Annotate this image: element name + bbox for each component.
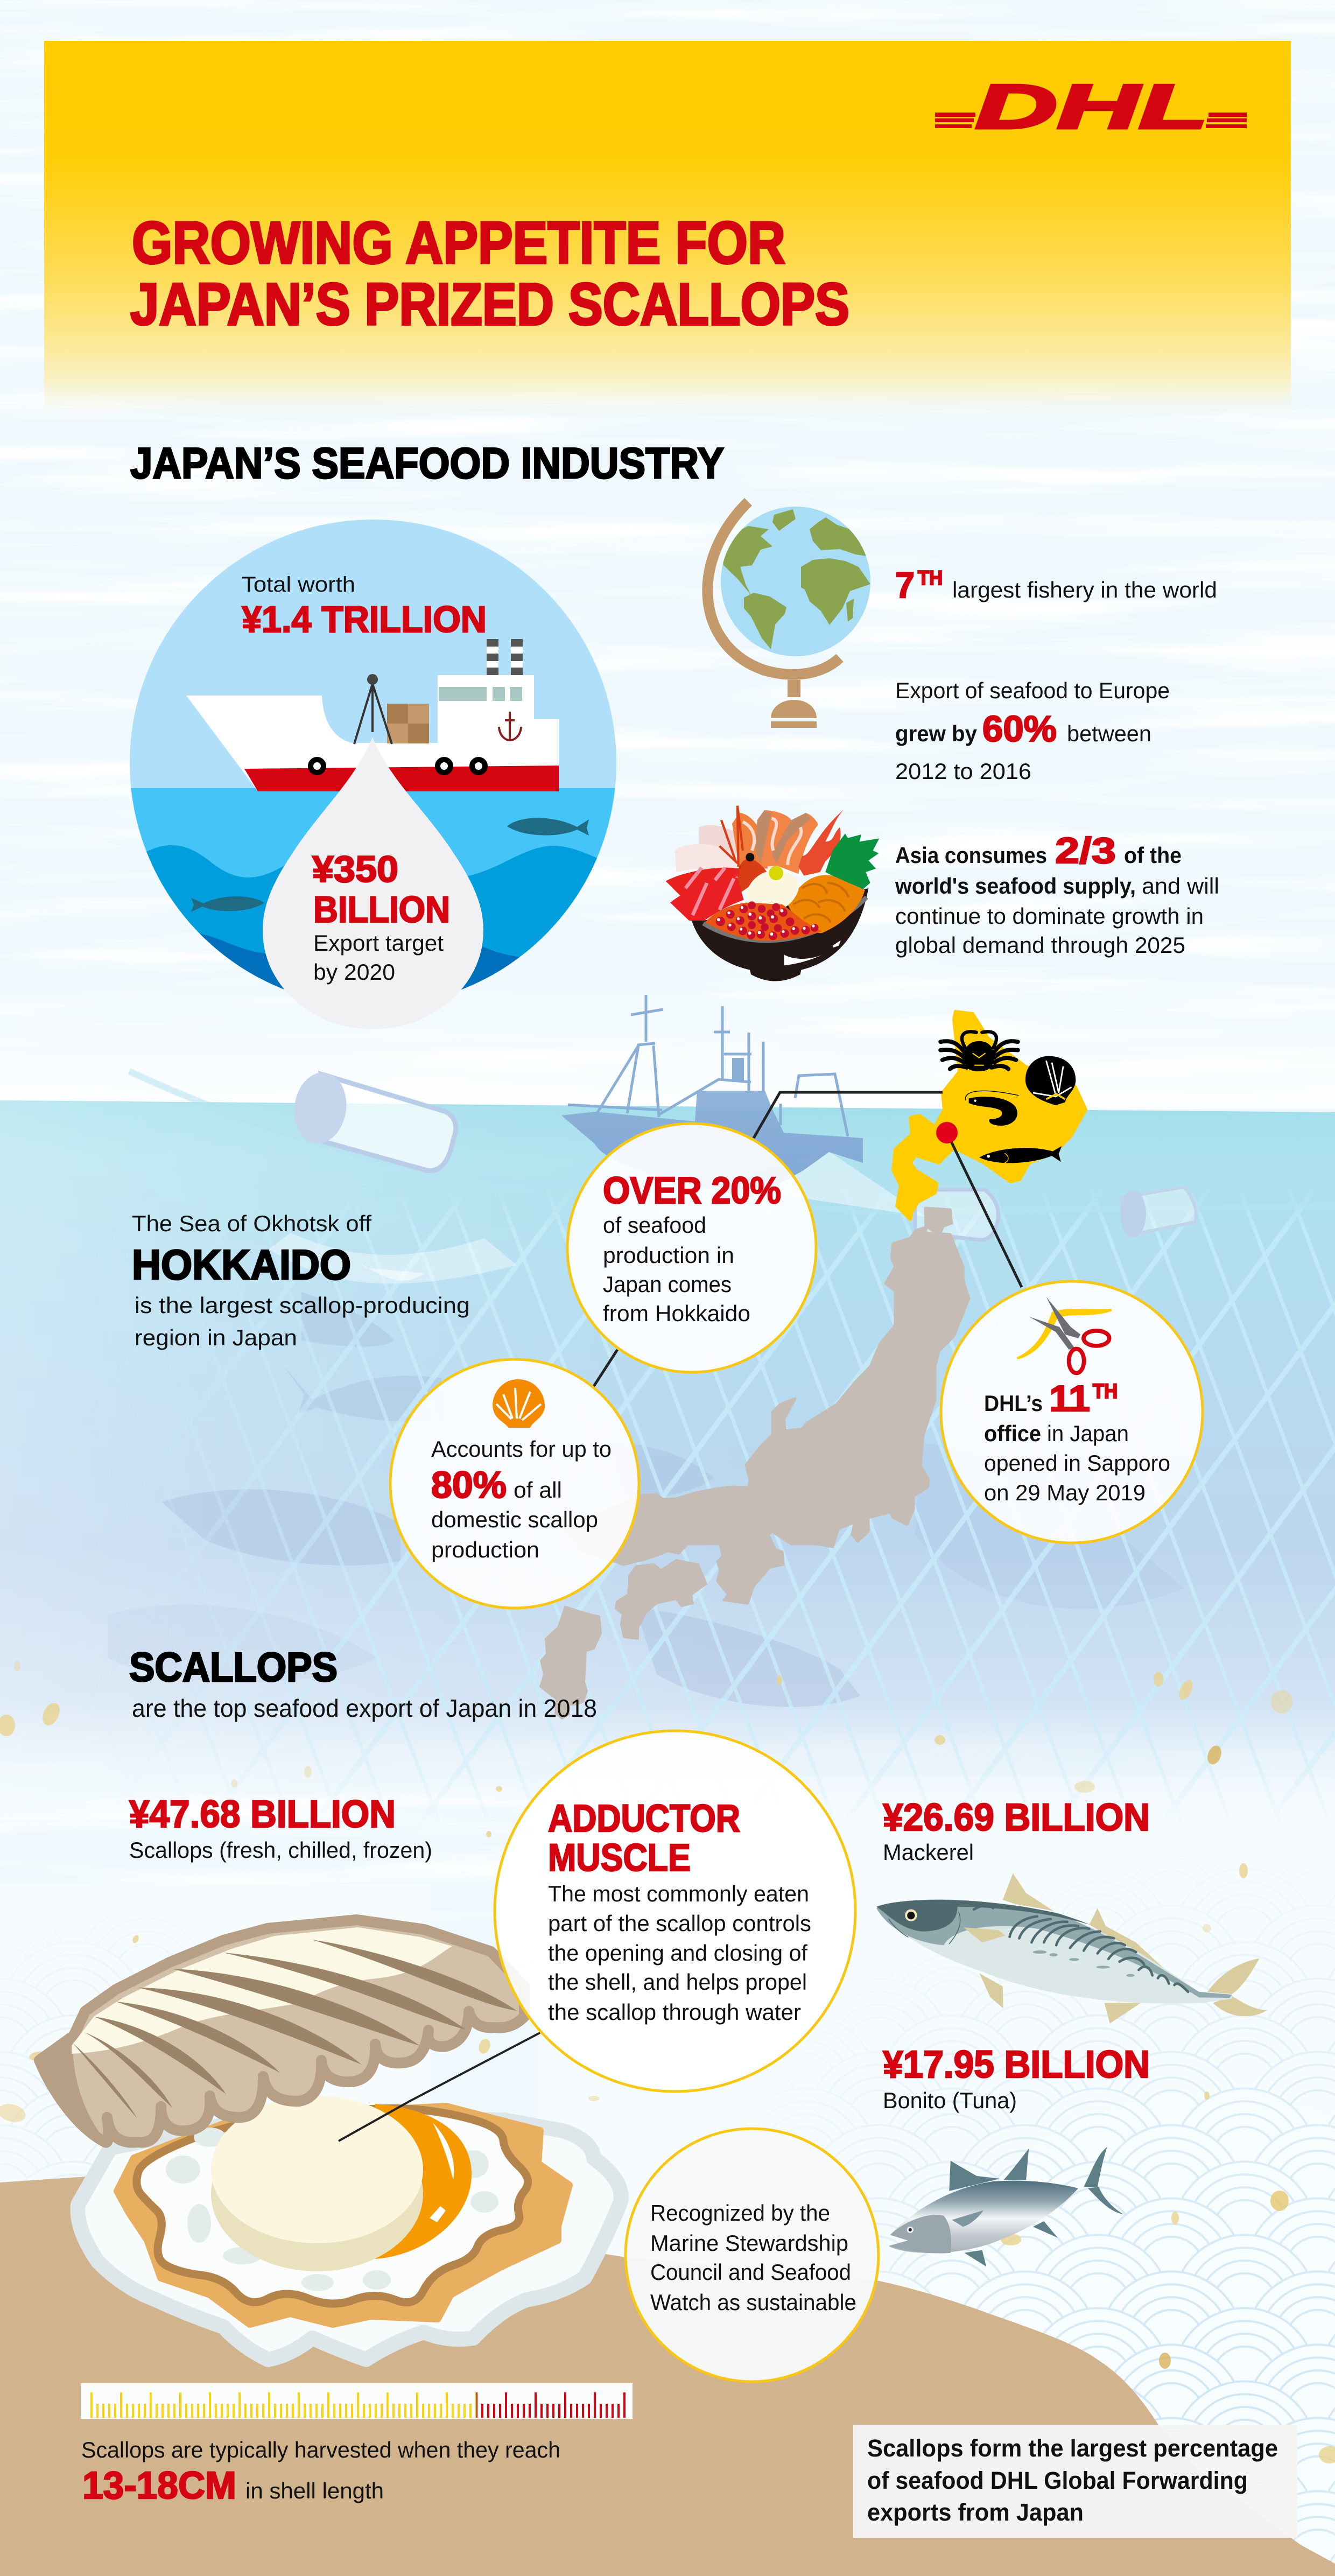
callout: sustainability: [626, 2129, 879, 2382]
stat: 7th largest fishery: 7: [895, 565, 915, 606]
stat: Asia consumption: continue to dominate growth in: [895, 903, 1204, 929]
icon: black scallop: [1025, 1056, 1076, 1105]
stat: bonito value: [883, 2044, 1150, 2113]
adductor muscle: [375, 2104, 472, 2259]
callout: DHL's 11th office: TH: [1093, 1380, 1118, 1403]
callout: DHL's 11th office: DHL’s: [984, 1391, 1043, 1416]
callout: over 20%: OVER 20%: [603, 1169, 781, 1211]
float: left: [290, 1069, 456, 1171]
background: wave pattern left: [0, 1884, 431, 2234]
stat: Asia consumption: 2/3: [1055, 830, 1116, 871]
stat: mackerel value: Mackerel: [883, 1840, 974, 1865]
callout: over 20%: production in: [603, 1243, 734, 1268]
DHL logo: DHL: [975, 72, 1208, 142]
heading: scallops: [129, 1645, 597, 1722]
text: Hokkaido intro: [132, 1211, 470, 1350]
callout: adductor muscle: [495, 1731, 855, 2091]
callout: DHL's 11th office: [941, 1281, 1203, 1543]
icon: shrimp: [966, 1091, 1018, 1126]
bottom shell: [78, 2116, 621, 2360]
stat: 7th largest fishery: TH: [918, 567, 943, 589]
stat: scallops value: ¥47.68 BILLION: [129, 1793, 396, 1836]
heading: Japan's seafood industry: JAPAN’S SEAFOOD INDUSTRY: [130, 439, 724, 488]
callout: over 20%: Japan comes: [603, 1272, 732, 1297]
export target drop: Export target: [313, 930, 444, 956]
ruler: [81, 2383, 633, 2419]
icon: fish right: [507, 818, 589, 836]
icon: globe: [707, 502, 875, 728]
background: left wave fade: [0, 1884, 431, 2234]
callout: adductor muscle: the shell, and helps propel: [548, 1969, 807, 1995]
export target drop: [263, 737, 483, 1029]
callout: 80% of domestic scallop production: domestic scallop: [431, 1507, 598, 1532]
total worth text: ¥1.4 TRILLION: [242, 599, 487, 640]
callout: DHL's 11th office: in Japan: [1047, 1421, 1129, 1446]
text: harvest length: [81, 2437, 560, 2507]
header panel: [44, 41, 1291, 418]
callout: DHL's 11th office: office: [984, 1421, 1041, 1446]
stat: Europe exports: between: [1067, 721, 1151, 746]
background: wave pattern lower right: [538, 1777, 1335, 2576]
decorative petals: [0, 1661, 1335, 2463]
stat: Asia consumption: Asia consumes: [895, 843, 1047, 868]
stat: Europe exports: 2012 to 2016: [895, 759, 1031, 784]
connector: boat to Hokkaido: [754, 1092, 943, 1138]
illustration: mackerel: [876, 1873, 1268, 2024]
stat: Europe exports: Export of seafood to Europe: [895, 678, 1170, 703]
top shell: [39, 1920, 524, 2143]
background: right wave fade: [538, 1777, 1335, 2576]
stat: Asia consumption: [895, 830, 1219, 958]
icon: crab: [940, 1031, 1018, 1071]
title: GROWING APPETITE FOR: [132, 210, 785, 276]
tan mantle: [117, 2107, 569, 2324]
callout: adductor muscle: the opening and closing of: [548, 1940, 807, 1966]
icon: black fish: [979, 1146, 1062, 1163]
title: JAPAN’S PRIZED SCALLOPS: [130, 271, 849, 338]
background: brush streaks: [0, 0, 1335, 1992]
callout: adductor muscle: part of the scallop controls: [548, 1911, 811, 1936]
total worth text: [242, 573, 487, 640]
stat: 7th largest fishery: [895, 565, 1217, 606]
callout: 80% of domestic scallop production: of all: [514, 1477, 562, 1503]
icon: ribbon-cutting scissors: [1017, 1297, 1112, 1373]
heading: scallops: are the top seafood export of Japan in 2018: [132, 1694, 597, 1722]
float: right: [1120, 1187, 1196, 1238]
stat: bonito value: ¥17.95 BILLION: [883, 2044, 1150, 2086]
float: centre right: [915, 1190, 998, 1240]
fish silhouettes in sea: [108, 1292, 1184, 1707]
stat: Asia consumption: and will: [1142, 873, 1219, 899]
map: Japan main islands: [540, 1208, 969, 1718]
callout box: DHL exports: of seafood DHL Global Forwarding: [867, 2467, 1248, 2494]
sea background panel: [0, 1100, 1335, 1820]
icon: fish left: [191, 896, 264, 912]
callout: 80% of domestic scallop production: 80%: [431, 1464, 507, 1506]
callout: over 20%: [567, 1124, 816, 1372]
callout: 80% of domestic scallop production: production: [431, 1537, 539, 1562]
stat: Europe exports: [895, 678, 1170, 784]
sand seabed: [0, 2175, 1335, 2576]
inner shell edge: [137, 2109, 528, 2304]
callout: adductor muscle: ADDUCTOR: [548, 1798, 740, 1840]
callout: DHL's 11th office: opened in Sapporo: [984, 1450, 1170, 1476]
stat: mackerel value: [883, 1796, 1150, 1865]
text: Hokkaido intro: The Sea of Okhotsk off: [132, 1211, 371, 1236]
shell spots: [166, 2128, 498, 2291]
DHL logo: [935, 72, 1247, 142]
stat: Europe exports: 60%: [982, 708, 1057, 749]
callout: 80% of domestic scallop production: Accounts for up to: [431, 1436, 612, 1462]
callout: over 20%: from Hokkaido: [603, 1301, 750, 1326]
title: [130, 210, 849, 338]
text: Hokkaido intro: is the largest scallop-producing: [135, 1293, 470, 1318]
icon: orange scallop: [493, 1379, 545, 1428]
net rope and folds: [129, 1071, 1335, 1283]
fishing net: [219, 1210, 1335, 1803]
ship: [186, 639, 559, 791]
text: Hokkaido intro: region in Japan: [135, 1325, 297, 1350]
illustration: open scallop: [39, 1920, 621, 2360]
panel: ship and sea circle: [130, 520, 616, 1029]
callout: 80% of domestic scallop production: [390, 1359, 639, 1608]
stat: Asia consumption: global demand through 2025: [895, 932, 1185, 958]
stat: Europe exports: grew by: [895, 721, 978, 746]
callout: sustainability: Council and Seafood: [650, 2259, 851, 2285]
stat: Asia consumption: world's seafood supply,: [895, 873, 1136, 899]
callout: over 20%: of seafood: [603, 1212, 706, 1238]
stat: bonito value: Bonito (Tuna): [883, 2088, 1017, 2113]
export target drop: BILLION: [313, 889, 450, 930]
callout: sustainability: Watch as sustainable: [650, 2290, 856, 2315]
map: Hokkaido: [893, 1012, 1086, 1219]
export target drop: by 2020: [313, 959, 395, 985]
export target drop: ¥350: [312, 848, 398, 890]
callout box: DHL exports: Scallops form the largest percentage: [867, 2434, 1278, 2462]
callout: DHL's 11th office: 11: [1049, 1378, 1090, 1419]
shell ribs: [73, 1940, 517, 2118]
connector: muscle pointer: [339, 2033, 540, 2141]
marker: Sapporo red dot: [936, 1122, 958, 1143]
background: white glow above horizon: [0, 980, 1335, 1109]
callout: adductor muscle: MUSCLE: [548, 1837, 691, 1879]
text: harvest length: 13-18CM: [82, 2465, 236, 2507]
icon: seafood bowl: [666, 806, 879, 981]
callout box: DHL exports: exports from Japan: [867, 2498, 1084, 2526]
stat: Asia consumption: of the: [1124, 843, 1182, 868]
total worth text: Total worth: [242, 573, 355, 596]
stat: mackerel value: ¥26.69 BILLION: [883, 1796, 1150, 1839]
callout: adductor muscle: the scallop through water: [548, 1999, 801, 2025]
stat: 7th largest fishery: largest fishery in the world: [952, 577, 1217, 602]
callout box: DHL exports: [853, 2425, 1297, 2538]
connector: Sapporo to DHL office: [947, 1133, 1022, 1287]
fishing boat silhouette: [561, 995, 863, 1198]
callout: sustainability: Recognized by the: [650, 2200, 830, 2226]
stat: scallops value: Scallops (fresh, chilled, frozen): [129, 1837, 432, 1863]
illustration: bonito tuna: [889, 2147, 1123, 2266]
callout: sustainability: Marine Stewardship: [650, 2230, 848, 2256]
connector: between circles: [594, 1350, 617, 1386]
text: Hokkaido intro: HOKKAIDO: [132, 1241, 351, 1288]
text: harvest length: in shell length: [245, 2478, 384, 2503]
text: harvest length: Scallops are typically harvested when they reach: [81, 2437, 560, 2462]
callout: DHL's 11th office: on 29 May 2019: [984, 1480, 1146, 1505]
muscle highlights: [430, 2123, 454, 2222]
stat: scallops value: [129, 1793, 432, 1863]
heading: scallops: SCALLOPS: [129, 1645, 338, 1690]
callout: adductor muscle: The most commonly eaten: [548, 1881, 809, 1906]
